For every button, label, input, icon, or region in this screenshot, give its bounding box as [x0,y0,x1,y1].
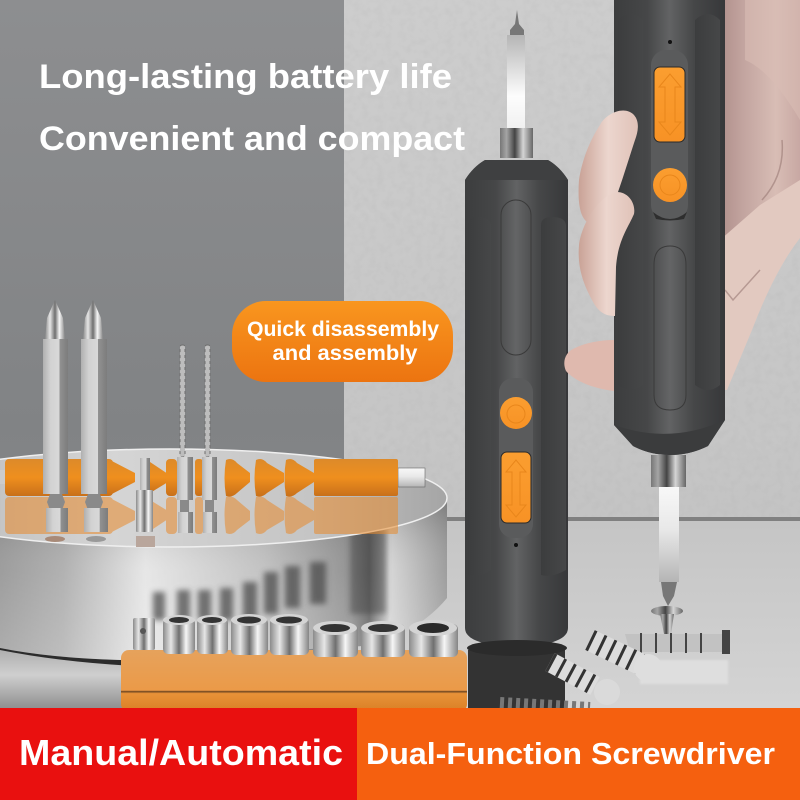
front screw [500,703,590,708]
left grip groove [618,14,643,390]
index finger [579,110,638,222]
orange socket tray [121,650,467,712]
left grip groove [468,217,491,576]
hand: fingers [564,110,638,391]
headline: convenient and compact: Convenient and compact [39,120,465,158]
body [465,160,568,647]
hex bit shaft [507,35,525,129]
large Phillips bit 2 [81,300,108,542]
direction slider [501,452,531,523]
screws on table [500,606,730,708]
chrome collar [500,128,533,158]
right grip groove [541,217,566,576]
indicator dot [668,40,672,44]
bit tip [510,10,524,36]
hex adapter bit [136,458,155,547]
drill bit 2 [202,345,217,533]
middle finger [579,192,634,316]
orange bit holder rod [0,459,425,534]
bottom banner: red: Manual/Automatic [19,732,343,773]
button panel [651,50,688,220]
body [614,0,725,455]
upright screw head [651,606,683,634]
reflection of left screwdriver on table [468,650,565,710]
palm lower and thumb [720,180,800,390]
hand: palm behind screwdriver [720,0,800,390]
callout: quick disassembly [232,301,453,382]
large Phillips bit 1 [43,300,68,542]
power button [500,397,532,429]
callout: quick disassembly: Quick disassembly [247,317,439,341]
right screwdriver [614,0,725,606]
steel shaft ends [398,468,425,487]
headline: battery life: Long-lasting battery life [39,58,452,96]
bottom banner: red [0,708,357,800]
left screwdriver [465,10,568,656]
chrome collar [651,455,686,487]
centre groove [501,200,531,355]
drill bit 1 [177,345,193,533]
right grip groove [695,14,720,390]
lower groove [654,246,686,410]
hex bit shaft [659,487,679,582]
horizontal screw reflection [640,660,728,684]
lower disc [0,640,135,710]
bit tip [661,582,677,606]
background: textured wall right panel [344,0,800,710]
socket set [133,614,458,657]
bottom banner: orange [357,708,800,800]
callout: quick disassembly: and assembly [272,341,418,365]
direction slider [654,67,685,142]
horizontal screw [625,630,730,654]
bottom banner: orange: Dual-Function Screwdriver [366,736,775,771]
palm upper [720,0,800,250]
rod body [5,459,398,497]
rod reflection [5,496,398,534]
disc side wall [0,498,447,660]
power button [653,168,687,202]
blurred socket reflection [153,530,386,620]
angled screw one [590,640,662,682]
ring finger [564,340,614,391]
metal disc base [0,449,447,710]
angled screw two [550,662,620,705]
disc top surface [0,449,447,547]
indicator dot [514,543,518,547]
background: grey left panel [0,0,345,710]
button panel [499,378,533,538]
